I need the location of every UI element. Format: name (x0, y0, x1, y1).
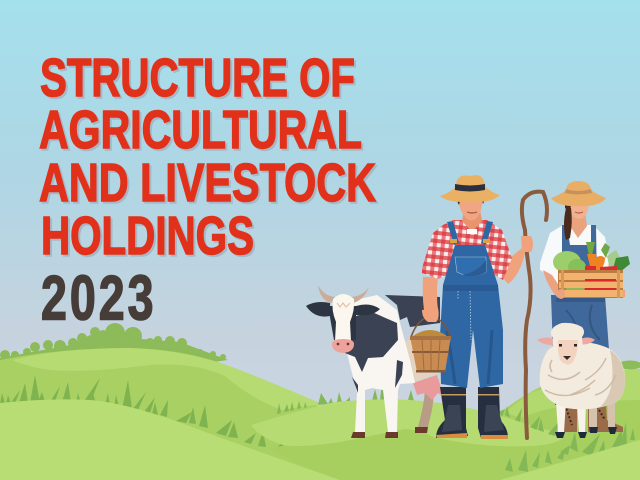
wool body (540, 342, 625, 409)
udder (413, 375, 444, 400)
head (328, 306, 356, 340)
title: STRUCTURE OF (40, 48, 355, 108)
straps (447, 221, 493, 245)
ears (306, 302, 380, 317)
hat (440, 175, 500, 202)
arms (543, 270, 564, 298)
neck and face (570, 212, 587, 238)
title: AND LIVESTOCK (39, 153, 376, 213)
cow (306, 285, 444, 438)
landscape: bushes and hills (0, 323, 640, 480)
grain (413, 330, 447, 336)
sheep (537, 323, 625, 438)
bib (562, 225, 597, 290)
title: AGRICULTURAL (39, 100, 362, 160)
hair (456, 192, 485, 205)
black neck patch (345, 312, 398, 372)
crate (558, 270, 623, 298)
back black (385, 295, 440, 327)
hand (557, 289, 565, 299)
male farmer (422, 175, 533, 439)
hair and braid (565, 196, 592, 212)
right dark hill (270, 369, 640, 480)
neck (462, 210, 482, 232)
boots (436, 387, 468, 438)
overalls (440, 245, 503, 388)
shirt (422, 220, 512, 280)
left arm (423, 277, 438, 310)
back legs (589, 400, 597, 429)
vegetable crate (553, 242, 630, 299)
year: 2023 (41, 263, 157, 333)
handle (411, 317, 450, 337)
feed bucket (410, 308, 451, 372)
grass along right bump (277, 383, 414, 414)
woman hat (551, 181, 606, 206)
right arm (503, 248, 525, 284)
grass behind front hill (0, 375, 316, 461)
back leg (418, 390, 434, 427)
back hill light ridge (12, 348, 322, 410)
hand on staff (521, 236, 533, 252)
overall legs (551, 295, 609, 405)
back hill dark face (0, 348, 380, 480)
pail (410, 336, 451, 372)
head and ears (537, 338, 595, 345)
front hill (0, 399, 340, 480)
face (458, 192, 483, 220)
vegetables (553, 251, 581, 273)
boots (562, 403, 577, 432)
horns (318, 285, 369, 303)
hand (422, 308, 439, 322)
grass tufts right (498, 406, 635, 472)
hooves (351, 432, 398, 438)
belly (398, 340, 440, 384)
white body and legs (345, 295, 415, 432)
shepherd staff (522, 192, 547, 438)
muzzle (332, 339, 354, 353)
right upper light hill (505, 369, 640, 418)
front legs (556, 402, 566, 432)
woman farmer (540, 181, 625, 432)
right bump light (251, 399, 565, 446)
distant bush right (618, 360, 640, 370)
front right hill (500, 440, 640, 480)
title (39, 48, 376, 266)
title: HOLDINGS (41, 206, 254, 266)
shirt (540, 225, 609, 290)
bushes (0, 323, 228, 372)
